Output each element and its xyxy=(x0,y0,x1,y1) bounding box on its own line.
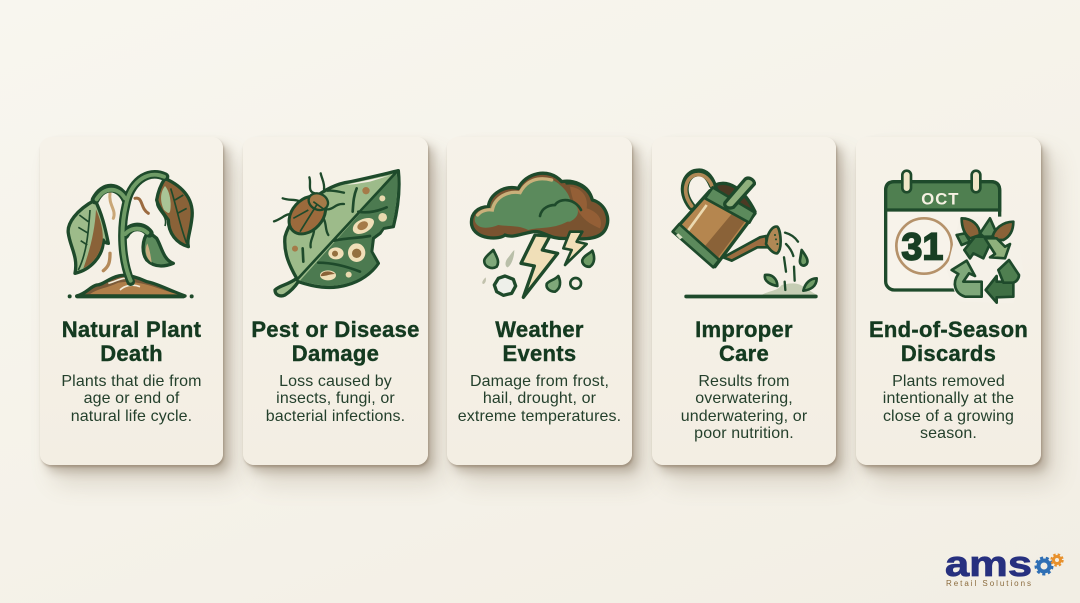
description: close of a growing xyxy=(883,408,1014,425)
description xyxy=(458,373,621,425)
description: extreme temperatures. xyxy=(458,408,621,425)
description: poor nutrition. xyxy=(694,425,794,442)
heading: Improper xyxy=(695,317,793,342)
date number: 31 xyxy=(901,226,943,268)
heading xyxy=(251,317,420,366)
icon: beetle on damaged leaf xyxy=(272,169,401,298)
heading: Care xyxy=(719,341,769,366)
description: natural life cycle. xyxy=(71,408,192,425)
description: insects, fungi, or xyxy=(276,390,395,407)
description xyxy=(266,373,405,425)
month label: OCT xyxy=(921,189,959,208)
heading: Death xyxy=(100,341,163,366)
description: season. xyxy=(920,425,977,442)
icon: watering can xyxy=(671,168,818,298)
description: Loss caused by xyxy=(279,373,392,390)
description: bacterial infections. xyxy=(266,408,405,425)
heading: Pest or Disease xyxy=(251,317,420,342)
description xyxy=(883,373,1014,442)
description: Plants removed xyxy=(892,373,1005,390)
panel: natural plant death xyxy=(40,137,223,465)
heading: Events xyxy=(503,341,576,366)
panel: end-of-season discards xyxy=(856,137,1041,465)
icon: storm cloud with hail xyxy=(470,172,610,300)
logo: ams Retail Solutions: Retail Solutions xyxy=(946,579,1031,588)
description: Plants that die from xyxy=(61,373,202,390)
logo: ams Retail Solutions: ams xyxy=(945,543,1032,584)
heading: Natural Plant xyxy=(62,317,201,342)
logo: ams Retail Solutions xyxy=(945,543,1064,588)
description: intentionally at the xyxy=(883,390,1014,407)
description xyxy=(61,373,202,425)
heading xyxy=(869,317,1028,366)
heading: End-of-Season xyxy=(869,317,1028,342)
panel: weather events xyxy=(447,137,632,465)
heading xyxy=(695,317,793,366)
heading xyxy=(62,317,201,366)
icon: gears xyxy=(1036,554,1062,574)
heading xyxy=(495,317,584,366)
heading: Damage xyxy=(292,341,379,366)
description: hail, drought, or xyxy=(483,390,596,407)
panel: improper care xyxy=(652,137,836,465)
description: Results from xyxy=(698,373,790,390)
description: age or end of xyxy=(84,390,179,407)
icon: calendar and recycling leaves xyxy=(884,169,1020,304)
description: underwatering, or xyxy=(681,408,807,425)
description: overwatering, xyxy=(695,390,793,407)
panel: pest or disease damage xyxy=(243,137,428,465)
description: Damage from frost, xyxy=(470,373,609,390)
heading: Discards xyxy=(901,341,996,366)
heading: Weather xyxy=(495,317,584,342)
description xyxy=(681,373,807,442)
icon: wilting plant xyxy=(66,170,194,298)
